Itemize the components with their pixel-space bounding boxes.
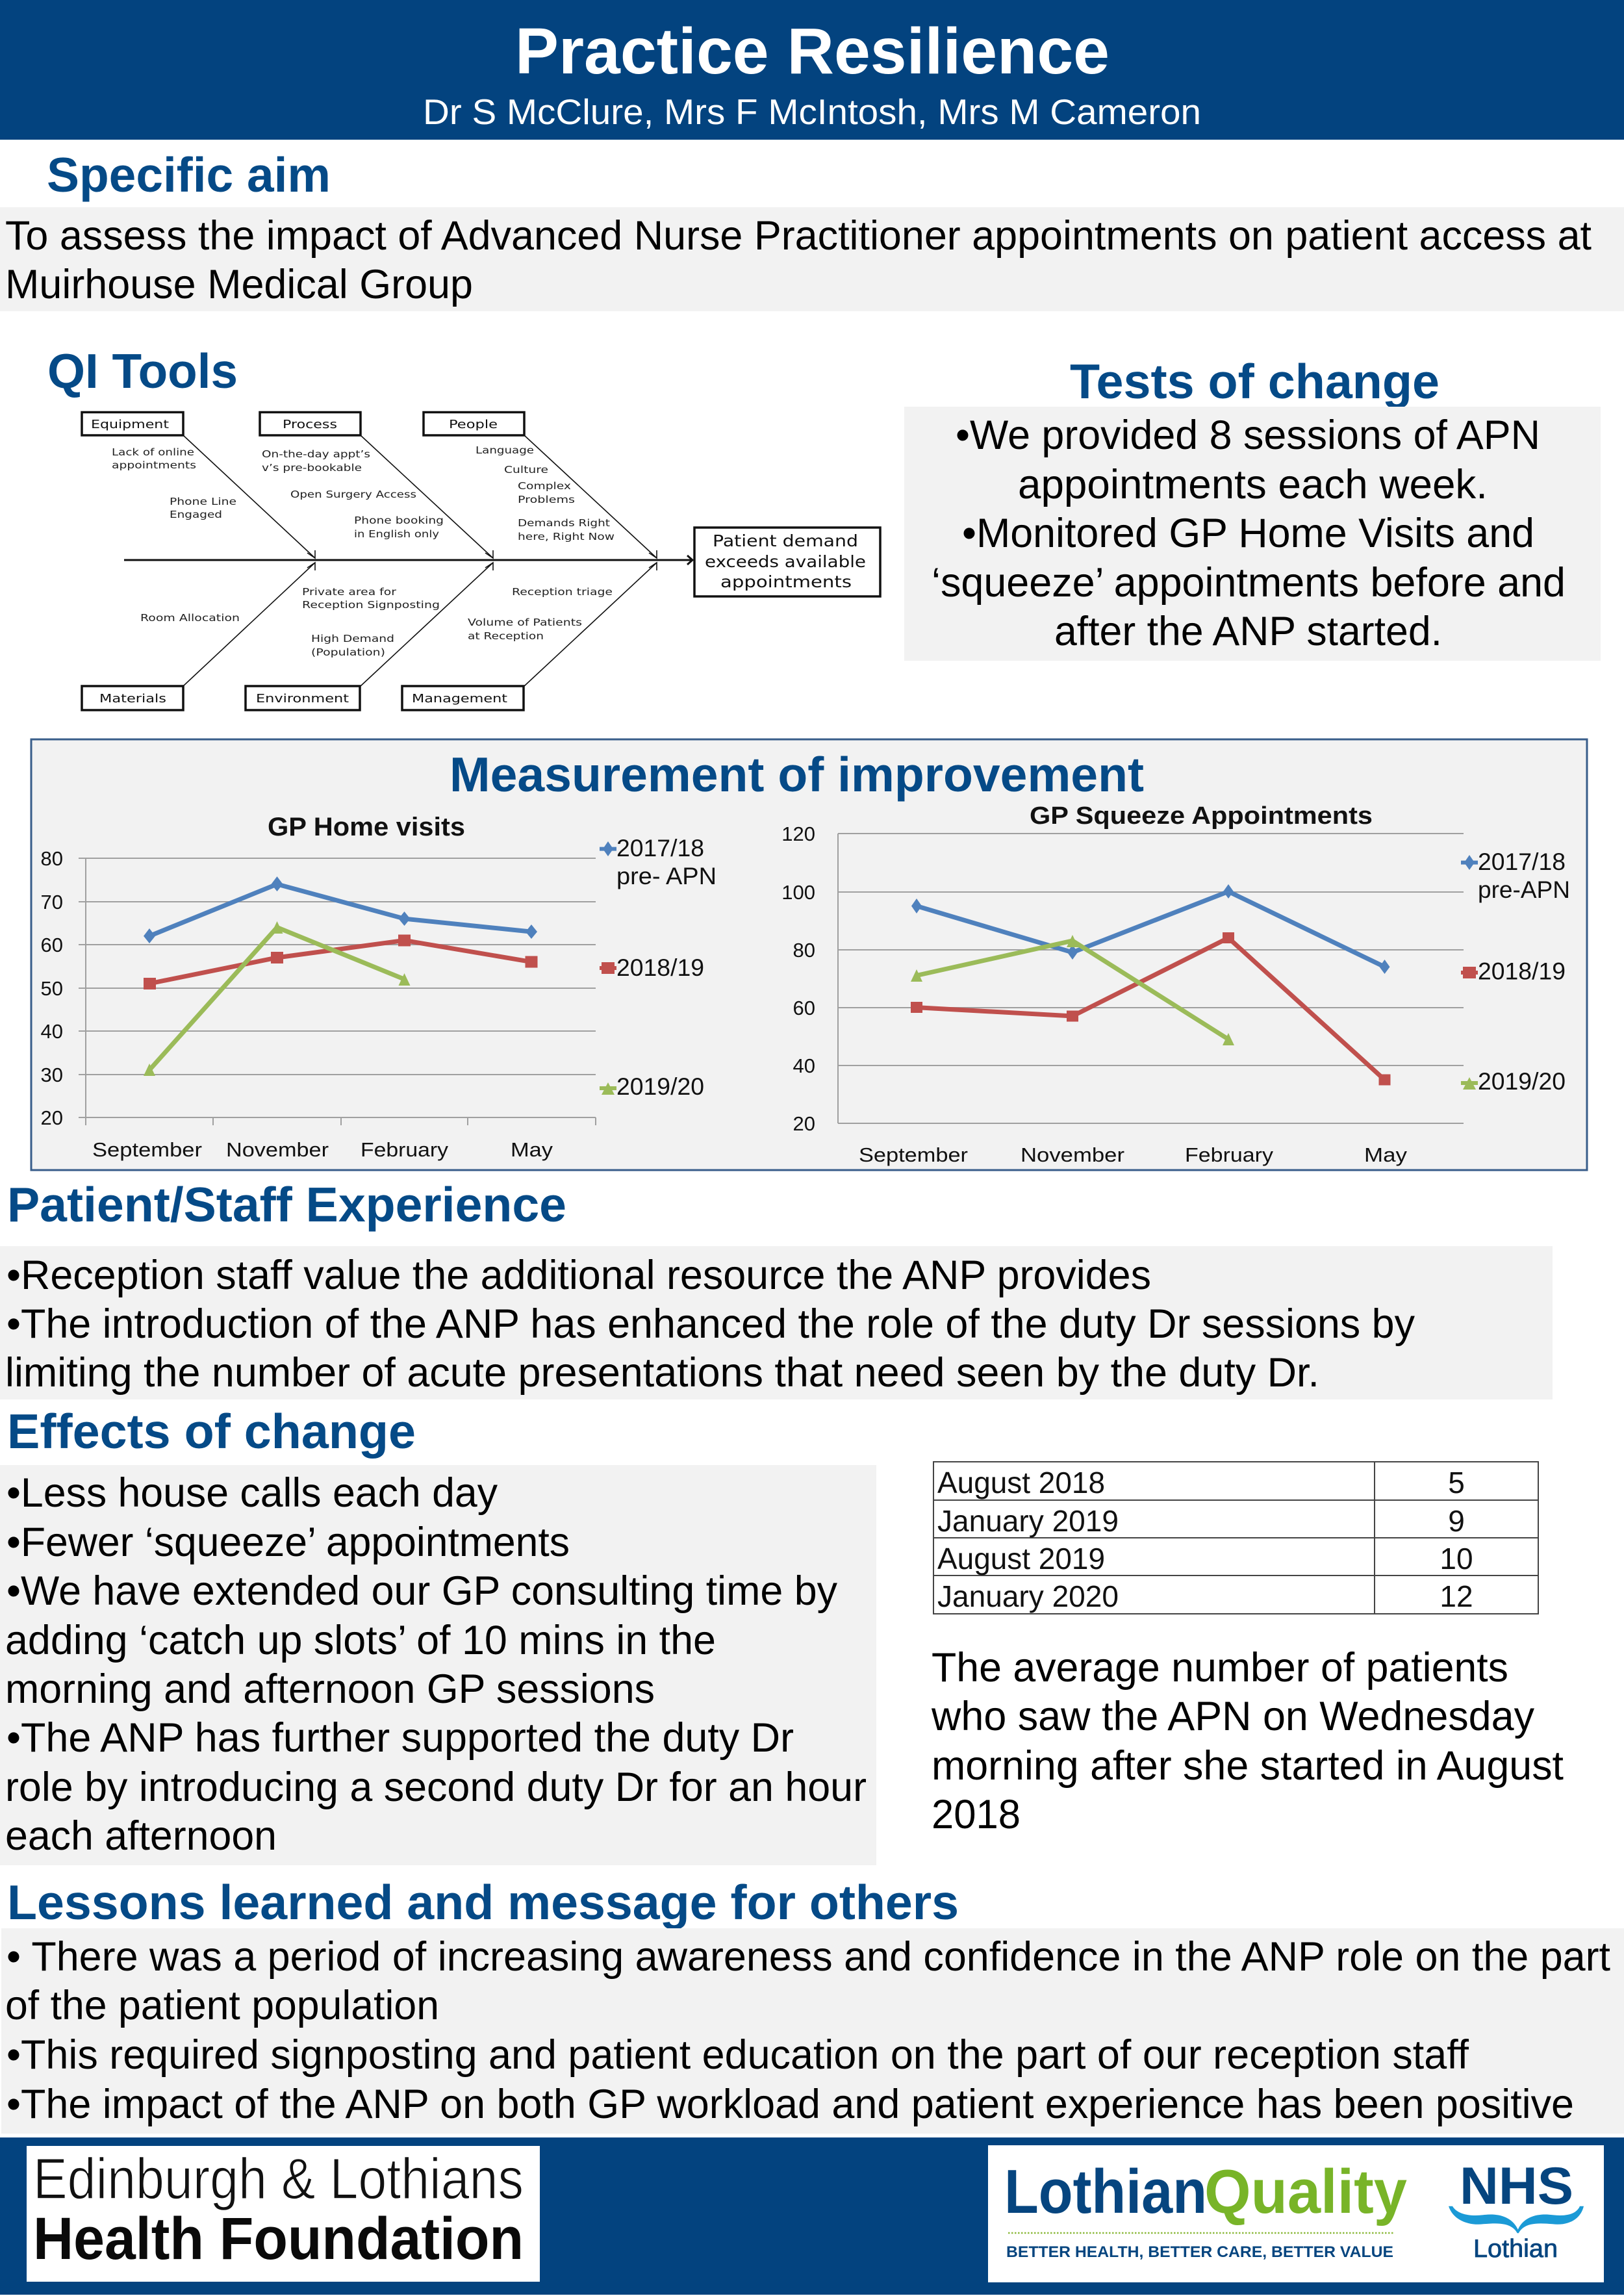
legend: 2017/18 [1478,848,1566,875]
heading: lessons learned: Lessons learned and message for others [7,1875,959,1930]
series: 2017/18 [911,884,1390,974]
fishbone diagram: at Reception [468,630,544,642]
panel: specific aim [0,147,1624,311]
fishbone diagram: appointments [720,572,852,591]
line chart: GP home visits: 60 [41,934,63,956]
footer banner [0,2137,1624,2295]
text: tests of change list: after the ANP started. [1054,609,1442,654]
panel: measurement of improvement [31,739,1587,1170]
logo: Lothian Quality and NHS Lothian: BETTER HEALTH, BETTER CARE, BETTER VALUE [1006,2243,1393,2261]
line chart: GP squeeze appointments: 80 [793,939,815,962]
line chart: GP home visits: 80 [41,847,63,870]
text: aim statement: Muirhouse Medical Group [5,262,473,307]
fishbone diagram: Phone booking [354,515,444,526]
fishbone diagram: exceeds available [705,552,866,571]
text: tests of change list: appointments each week. [1018,462,1488,507]
fishbone diagram: Engaged [170,509,222,520]
fishbone diagram: appointments [112,459,196,471]
fishbone diagram: Equipment [91,418,169,431]
fishbone diagram: Lack of online [112,446,194,458]
fishbone diagram: Room Allocation [140,612,240,624]
text: lessons bullets: •This required signposting and patient education on the part of our reception staff [6,2032,1469,2078]
series: 2019/20 [144,921,411,1076]
fishbone diagram: v’s pre-bookable [262,462,362,474]
fishbone diagram: Phone Line [170,496,236,507]
fishbone diagram: Process [283,418,337,431]
table: average APN patients: 10 [1440,1542,1473,1575]
panel: tests of change [904,354,1601,661]
text: table caption: who saw the APN on Wednesday [931,1694,1534,1739]
logo: Lothian Quality and NHS Lothian [988,2145,1604,2282]
line chart: GP squeeze appointments: 60 [793,997,815,1019]
legend: pre- APN [616,863,717,889]
text: tests of change list: •We provided 8 sessions of APN [956,413,1540,458]
logo: Lothian Quality and NHS Lothian: Lothian [1473,2235,1558,2263]
logo: Lothian Quality and NHS Lothian: Quality [1204,2157,1407,2226]
line chart: GP squeeze appointments: 40 [793,1054,815,1077]
text: lessons bullets: of the patient population [5,1983,439,2028]
line chart: GP squeeze appointments: 120 [781,823,815,845]
text: experience bullets: limiting the number of acute presentations that need seen by the duty Dr. [5,1350,1319,1396]
fishbone diagram: Open Surgery Access [290,489,416,500]
text: effects bullets [5,1470,867,1859]
fishbone diagram: Demands Right [518,517,610,529]
fishbone diagram: On-the-day appt’s [262,448,370,460]
table: average APN patients: January 2020 [937,1579,1119,1613]
text: tests of change list: ‘squeeze’ appointments before and [932,560,1566,606]
fishbone diagram: (Population) [311,646,385,658]
line chart: GP squeeze appointments: November [1021,1143,1124,1166]
line chart: GP home visits: 30 [41,1064,63,1086]
text: experience bullets: •Reception staff value the additional resource the ANP provides [6,1253,1151,1298]
legend: 2017/18 [616,835,704,861]
logo: Edinburgh & Lothians Health Foundation: Edinburgh & Lothians [33,2146,524,2211]
text: lessons bullets: • There was a period of increasing awareness and confidence in the ANP role on the part [6,1934,1610,1980]
text: tests of change list: •Monitored GP Home Visits and [962,511,1534,556]
line chart: GP squeeze appointments: May [1364,1143,1408,1166]
line chart: GP home visits [41,813,717,1161]
logo: Lothian Quality and NHS Lothian: NHS [1460,2157,1573,2215]
fishbone diagram: Management [412,692,507,706]
fishbone diagram: Reception triage [512,586,613,598]
series: 2017/18 [144,876,537,943]
text: effects bullets: •Fewer ‘squeeze’ appointments [6,1520,570,1565]
fishbone diagram: Private area for [302,586,397,598]
line chart: GP home visits: November [226,1138,329,1161]
legend [600,835,717,1100]
text: effects bullets: role by introducing a second duty Dr for an hour [5,1765,867,1810]
heading: measurement of improvement: Measurement of improvement [450,747,1144,802]
table: average APN patients: August 2019 [937,1542,1105,1575]
series: 2018/19 [911,932,1390,1085]
fishbone diagram: Language [476,444,534,456]
heading: specific aim: Specific aim [47,147,331,202]
chart title: GP Squeeze Appointments [1030,802,1373,830]
table: average APN patients: 5 [1448,1466,1465,1499]
text: lessons bullets: •The impact of the ANP on both GP workload and patient experience has been positive [6,2082,1574,2127]
line chart: GP home visits: May [511,1138,553,1161]
logo: Edinburgh & Lothians Health Foundation: Health Foundation [33,2206,524,2272]
fishbone diagram: Reception Signposting [302,599,440,611]
fishbone diagram: Problems [518,494,575,505]
legend: pre-APN [1478,876,1570,903]
line chart: GP home visits: September [92,1138,202,1161]
authors: Dr S McClure, Mrs F McIntosh, Mrs M Cameron [423,92,1201,132]
line chart: GP squeeze appointments: February [1185,1143,1274,1166]
table: average APN patients: 12 [1440,1579,1473,1613]
fishbone diagram: People [449,418,498,431]
legend: 2019/20 [1478,1068,1566,1095]
logo: Lothian Quality and NHS Lothian: Lothian [1004,2157,1207,2226]
text: effects bullets: •The ANP has further supported the duty Dr [6,1715,794,1761]
heading: tests of change: Tests of change [1070,354,1440,409]
line chart: GP home visits: 40 [41,1020,63,1043]
line chart: GP home visits: 50 [41,977,63,1000]
table: average APN patients [933,1462,1538,1614]
heading: QI tools: QI Tools [47,344,238,398]
header banner [0,0,1624,140]
panel: effects of change [0,1404,876,1865]
text: table caption: The average number of patients [932,1645,1508,1690]
text: effects bullets: •Less house calls each day [6,1470,498,1516]
logo: Edinburgh & Lothians Health Foundation [27,2146,540,2282]
text: experience bullets: •The introduction of the ANP has enhanced the role of the duty Dr sessions by [6,1301,1415,1347]
line chart: GP home visits: 70 [41,891,63,913]
fishbone diagram: High Demand [311,633,394,644]
text: effects bullets: morning and afternoon GP sessions [5,1666,655,1712]
text: effects bullets: each afternoon [5,1813,277,1859]
line chart: GP home visits: February [361,1138,449,1161]
panel: lessons learned [1,1875,1624,2134]
table: average APN patients: August 2018 [937,1466,1105,1499]
fishbone diagram: Volume of Patients [468,617,582,628]
series: 2019/20 [911,935,1234,1045]
heading: patient/staff experience: Patient/Staff Experience [7,1177,566,1232]
legend: 2018/19 [1478,958,1566,985]
heading: effects of change: Effects of change [7,1404,416,1459]
fishbone diagram [82,412,880,710]
panel: patient/staff experience [0,1177,1553,1399]
fishbone diagram: Patient demand [713,531,858,550]
text: lessons bullets [5,1934,1610,2127]
text: effects bullets: adding ‘catch up slots’ of 10 mins in the [5,1618,716,1663]
title: Practice Resilience [515,15,1110,88]
fishbone diagram: Complex [518,480,571,492]
line chart: GP squeeze appointments: 20 [793,1112,815,1135]
fishbone diagram: Culture [504,464,548,476]
table: average APN patients: 9 [1448,1504,1465,1538]
fishbone diagram: Environment [256,692,349,706]
legend: 2018/19 [616,954,704,981]
fishbone diagram: Materials [99,692,166,706]
series: 2018/19 [144,934,538,989]
chart title: GP Home visits [268,813,465,841]
legend [1461,848,1570,1095]
text: table caption: 2018 [932,1792,1021,1837]
table: average APN patients: January 2019 [937,1504,1119,1538]
text: aim statement [5,213,1592,307]
line chart: GP squeeze appointments: 100 [781,881,815,904]
legend: 2019/20 [616,1073,704,1100]
text: aim statement: To assess the impact of Advanced Nurse Practitioner appointments on patient access at [5,213,1592,259]
text: table caption: morning after she started in August [932,1743,1564,1789]
text: experience bullets [5,1253,1415,1396]
line chart: GP home visits: 20 [41,1106,63,1129]
text: table caption [931,1645,1564,1837]
fishbone diagram: here, Right Now [518,531,615,542]
fishbone diagram: in English only [354,528,439,540]
line chart: GP squeeze appointments: September [859,1143,968,1166]
line chart: GP squeeze appointments [781,802,1570,1166]
text: effects bullets: •We have extended our GP consulting time by [6,1568,837,1614]
text: tests of change list [932,413,1566,654]
